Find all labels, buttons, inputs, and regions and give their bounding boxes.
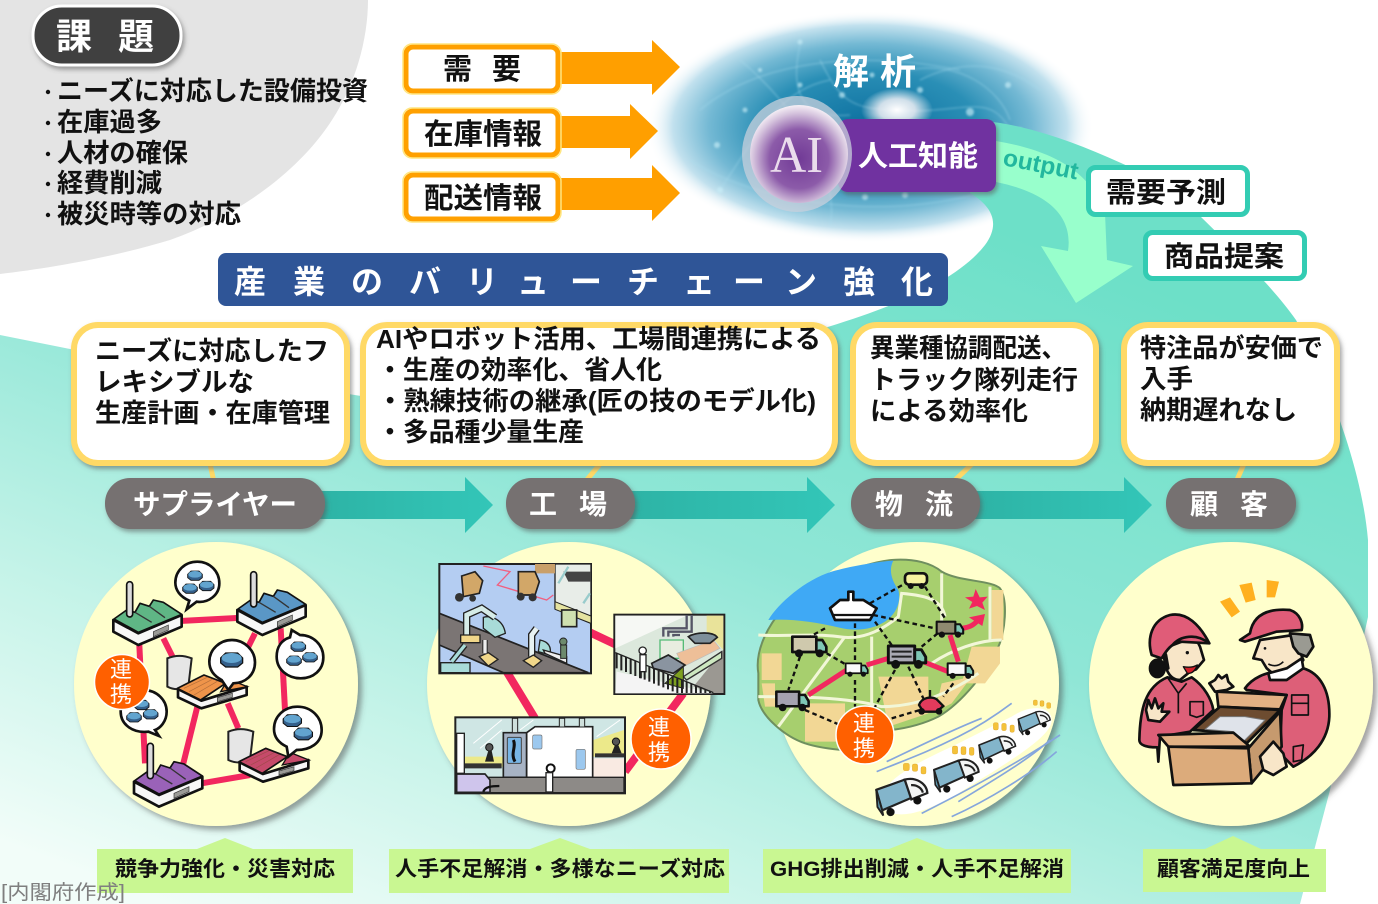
arrow: demand input	[558, 40, 680, 95]
callout: logistics: トラック隊列走行	[870, 365, 1078, 395]
label: output: output	[1001, 144, 1081, 185]
outcome label: factory: 人手不足解消・多様なニーズ対応	[395, 857, 725, 881]
outcome label: factory	[389, 838, 729, 893]
input box: delivery: 配送情報	[424, 182, 542, 215]
stage: supplier: サプライヤー	[133, 489, 297, 520]
connector: supplier	[210, 464, 214, 482]
heading: analysis: 解析	[833, 51, 916, 92]
callout: supplier	[74, 325, 347, 463]
arrow: delivery input	[558, 165, 680, 221]
stage: factory: 工場	[529, 489, 607, 520]
output box: demand forecast	[1088, 168, 1248, 214]
input box: inventory	[403, 108, 561, 158]
callout: factory: AIやロボット活用、工場間連携による	[376, 324, 821, 354]
analysis nebula	[646, 11, 1094, 243]
connector: customer	[1236, 464, 1244, 482]
text block: issues list: 人材の確保	[57, 138, 188, 168]
text block: issues list: 被災時等の対応	[57, 199, 241, 229]
stage: factory	[506, 478, 635, 529]
banner: value chain	[218, 253, 948, 306]
callout: supplier: ニーズに対応したフ	[95, 336, 329, 366]
source note: [内閣府作成]	[1, 881, 125, 904]
illustration: supplier network	[74, 542, 358, 826]
AI orb	[742, 96, 852, 212]
badge: collaboration factory	[631, 709, 691, 769]
callout: customer: 特注品が安価で	[1140, 333, 1323, 363]
stage: logistics: 物流	[875, 489, 953, 520]
text block: issues list: 在庫過多	[57, 107, 162, 137]
arrow: factory to logistics	[625, 477, 835, 533]
AI purple label: 人工知能	[858, 140, 978, 173]
callout: supplier: 生産計画・在庫管理	[95, 398, 330, 428]
text block: issues list: ニーズに対応した設備投資	[57, 76, 368, 106]
text block: issues list	[46, 76, 368, 229]
callout: customer: 納期遅れなし	[1140, 395, 1297, 425]
badge: collaboration logistics: 連	[853, 711, 875, 736]
callout: factory	[363, 324, 835, 463]
output box: product proposal: 商品提案	[1164, 241, 1284, 272]
callout: logistics: 異業種協調配送、	[870, 333, 1066, 363]
arrow: supplier to factory	[315, 477, 493, 533]
input box: inventory: 在庫情報	[424, 118, 542, 151]
callout: factory: ・生産の効率化、省人化	[377, 355, 662, 385]
outcome label: customer: 顧客満足度向上	[1157, 858, 1310, 881]
outcome label: customer	[1143, 836, 1326, 892]
callout: supplier: レキシブルな	[95, 367, 254, 397]
AI purple label	[838, 119, 996, 192]
callout: logistics: による効率化	[870, 396, 1028, 426]
badge: collaboration supplier: 連	[110, 657, 132, 682]
outcome label: logistics	[763, 838, 1071, 893]
illustration: happy customers	[1089, 542, 1373, 826]
text block: issues list: 経費削減	[57, 168, 162, 198]
banner: value chain: 産業のバリューチェーン強化	[234, 264, 933, 300]
callout: logistics	[853, 325, 1096, 463]
stage: customer	[1166, 478, 1296, 529]
output box: product proposal	[1146, 232, 1304, 278]
outcome label: supplier	[97, 838, 353, 893]
illustration: smart factory	[427, 542, 724, 826]
callout: factory: ・熟練技術の継承(匠の技のモデル化)	[377, 386, 816, 416]
badge: collaboration supplier	[94, 654, 150, 710]
input box: demand: 需要	[443, 54, 521, 86]
callout: factory: ・多品種少量生産	[377, 417, 584, 447]
connector: logistics	[953, 464, 972, 482]
callout: customer: 入手	[1140, 364, 1193, 394]
input box: demand	[403, 44, 561, 94]
heading: issues	[33, 6, 181, 65]
arrow: logistics to customer	[970, 477, 1152, 533]
stage: customer: 顧客	[1190, 489, 1268, 520]
connector: factory	[585, 464, 600, 482]
input box: delivery	[403, 172, 561, 222]
badge: collaboration factory: 携	[648, 740, 670, 765]
stage: supplier	[105, 478, 325, 529]
callout: customer	[1124, 325, 1337, 463]
AI orb: AI	[770, 127, 823, 184]
illustration: logistics map	[758, 542, 1060, 826]
arrow: inventory input	[558, 104, 658, 159]
heading: issues: 課題	[56, 16, 154, 57]
badge: collaboration logistics: 携	[853, 736, 875, 761]
badge: collaboration logistics	[836, 706, 894, 764]
badge: collaboration supplier: 携	[110, 682, 132, 707]
panel: issues background blob	[0, 0, 368, 274]
arrow: output	[996, 141, 1133, 303]
output box: demand forecast: 需要予測	[1106, 177, 1226, 208]
badge: collaboration factory: 連	[648, 715, 670, 740]
stage: logistics	[851, 478, 980, 529]
outcome label: logistics: GHG排出削減・人手不足解消	[770, 857, 1064, 881]
outcome label: supplier: 競争力強化・災害対応	[115, 858, 335, 881]
